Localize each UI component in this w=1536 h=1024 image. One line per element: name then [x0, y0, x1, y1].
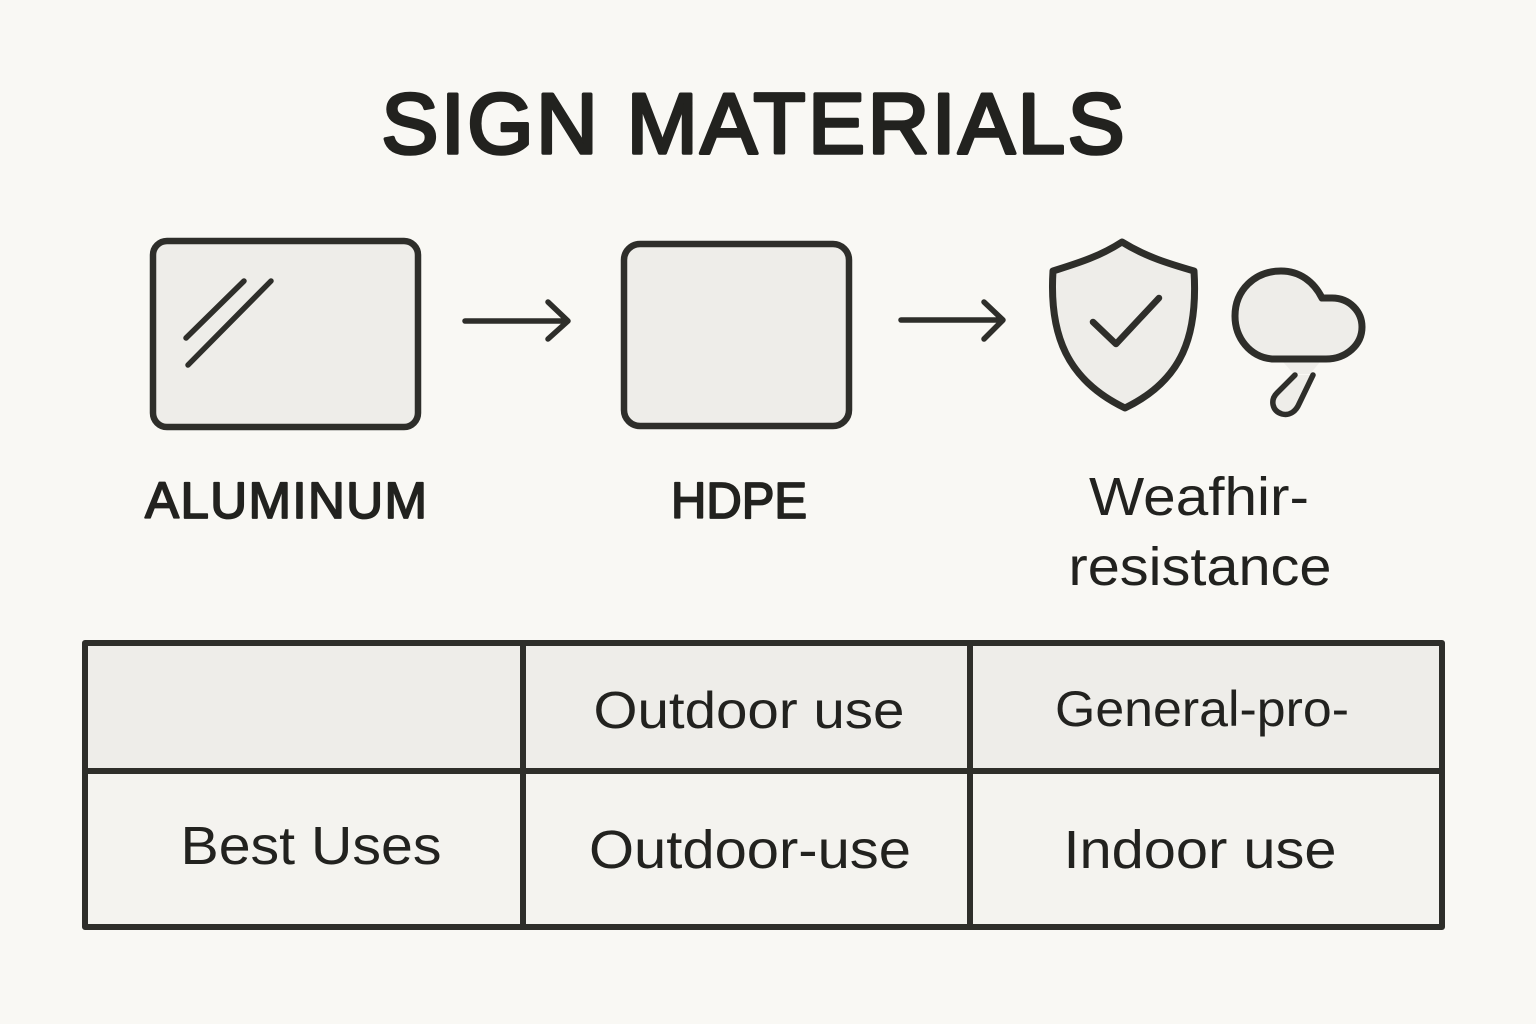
title: SIGN MATERIALS	[382, 77, 1124, 172]
icon: HDPE sheet	[624, 244, 849, 426]
label: HDPE: HDPE	[671, 472, 807, 529]
header cell: general-pro: General-pro-	[1055, 681, 1349, 737]
table body row background	[85, 771, 1442, 926]
label: weather resistance: resistance	[1068, 537, 1332, 597]
arrow: HDPE to weather resistance	[901, 302, 1003, 339]
label: weather resistance: Weafhir-	[1089, 467, 1309, 527]
table header row background	[85, 644, 1442, 771]
arrow: aluminum to HDPE	[465, 302, 568, 339]
label: aluminum: ALUMINUM	[145, 472, 427, 529]
cell: outdoor-use: Outdoor-use	[589, 820, 911, 880]
cell: indoor use: Indoor use	[1064, 820, 1336, 880]
header cell: outdoor use: Outdoor use	[594, 682, 904, 740]
row label: best uses: Best Uses	[180, 816, 442, 876]
icon: aluminum sheet	[153, 241, 418, 427]
comparison table	[85, 643, 1442, 927]
label: weather resistance	[1068, 467, 1332, 597]
icon: rain cloud	[1235, 271, 1362, 414]
icon: shield with check	[1052, 242, 1195, 408]
table grid	[85, 643, 1442, 927]
